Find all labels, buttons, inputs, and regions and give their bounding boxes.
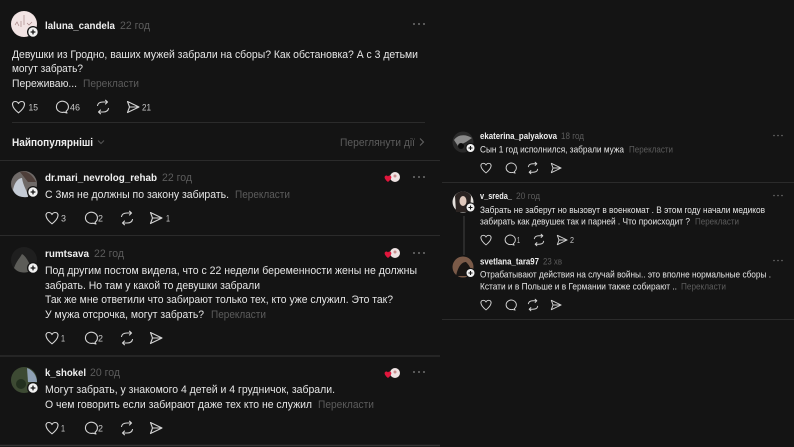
comment: rumtsava: rumtsava [45, 249, 89, 260]
comment: k_shokel: k_shokel [45, 368, 86, 379]
comment: rumtsava: 2 [98, 334, 103, 344]
sort bar: Переглянути дії [340, 137, 415, 149]
comment: rumtsava [11, 247, 425, 345]
avatar [452, 192, 476, 213]
avatar: laluna_candela [11, 11, 39, 38]
avatar [452, 256, 476, 278]
post text: Девушки из Гродно, ваших мужей забрали на сборы? Как обстановка? А с 3 детьми [12, 49, 418, 61]
post actions: 21 [142, 102, 151, 114]
comment: svetlana_tara97 [452, 256, 783, 311]
comment: rumtsava: Под другим постом видела, что с 22 недели беременности жены не должны [45, 265, 417, 277]
thread line [463, 216, 465, 255]
comment: ekaterina_palyakova [452, 131, 783, 174]
comment: ekaterina_palyakova: ekaterina_palyakova [480, 131, 558, 141]
comment: rumtsava: Перекласти [211, 309, 266, 321]
avatar [11, 367, 39, 394]
comment: v_sreda_: 1 [517, 236, 520, 245]
comment: ekaterina_palyakova: 18 год [561, 131, 584, 141]
panel: main post [11, 11, 425, 114]
comment: v_sreda_ [452, 191, 783, 246]
comment: dr.mari_nevrolog_rehab: Перекласти [235, 189, 290, 201]
comment: k_shokel: 20 год [90, 367, 121, 379]
sort bar [12, 137, 424, 149]
comment: k_shokel: 1 [61, 424, 65, 434]
comment: rumtsava: 1 [61, 334, 65, 344]
post actions [13, 100, 151, 114]
comment: v_sreda_: 2 [570, 236, 574, 245]
comment: v_sreda_: v_sreda_ [480, 191, 513, 201]
comment: k_shokel: Могут забрать, у знакомого 4 детей и 4 грудничок, забрали. [45, 384, 335, 396]
post text: могут забрать? [12, 63, 83, 75]
comment: k_shokel: Перекласти [318, 399, 374, 411]
post text: Переживаю... [12, 78, 77, 90]
comment: dr.mari_nevrolog_rehab: dr.mari_nevrolog_rehab [45, 173, 157, 184]
comment: svetlana_tara97: 23 хв [543, 256, 562, 266]
comment: dr.mari_nevrolog_rehab [11, 171, 425, 225]
sort bar: Найпопулярніші [12, 137, 93, 149]
comment: svetlana_tara97: Кстати и в Польше и в Германии также собирают .. [480, 282, 677, 292]
comment: dr.mari_nevrolog_rehab: 22 год [162, 172, 193, 184]
comment: k_shokel: О чем говорить если забирают даже тех кто не служил [45, 399, 312, 411]
comment: ekaterina_palyakova: Сын 1 год исполнился, забрали мужа [480, 144, 625, 154]
comment: v_sreda_: 20 год [516, 191, 540, 201]
comment: rumtsava: Так же мне ответили что забирают только тех, кто уже служил. Это так? [45, 294, 393, 306]
comment: rumtsava: 22 год [94, 248, 125, 260]
comment: v_sreda_: Перекласти [695, 216, 739, 226]
post author: laluna_candela [45, 21, 115, 32]
comment: dr.mari_nevrolog_rehab: 1 [166, 214, 170, 224]
comment: svetlana_tara97: svetlana_tara97 [480, 256, 539, 266]
post text [12, 49, 418, 90]
avatar [11, 171, 39, 198]
comment: dr.mari_nevrolog_rehab: С 3мя не должны по закону забирать. [45, 189, 229, 201]
avatar [452, 132, 476, 153]
comment: rumtsava: У мужа отсрочка, могут забрать? [45, 309, 204, 321]
comment: v_sreda_: забирать как девушек так и парней . Что происходит ? [480, 216, 690, 226]
comment: ekaterina_palyakova: Перекласти [629, 144, 673, 154]
comment: dr.mari_nevrolog_rehab: 2 [98, 214, 103, 224]
icon: more menu [413, 23, 425, 25]
avatar [11, 247, 39, 274]
post text: Перекласти [83, 78, 139, 90]
comment: rumtsava: забрать. Но там у какой то девушки забрали [45, 280, 260, 292]
comment: k_shokel [11, 367, 425, 435]
post actions: 15 [28, 102, 38, 114]
post actions: 46 [70, 102, 80, 114]
comment: v_sreda_: Забрать не заберут но вызовут в военкомат . В этом году начали медиков [480, 205, 765, 215]
comment: k_shokel: 2 [98, 424, 103, 434]
comment: dr.mari_nevrolog_rehab: 3 [61, 214, 66, 224]
post time: 22 год [120, 20, 151, 32]
comment: svetlana_tara97: Перекласти [681, 282, 726, 292]
